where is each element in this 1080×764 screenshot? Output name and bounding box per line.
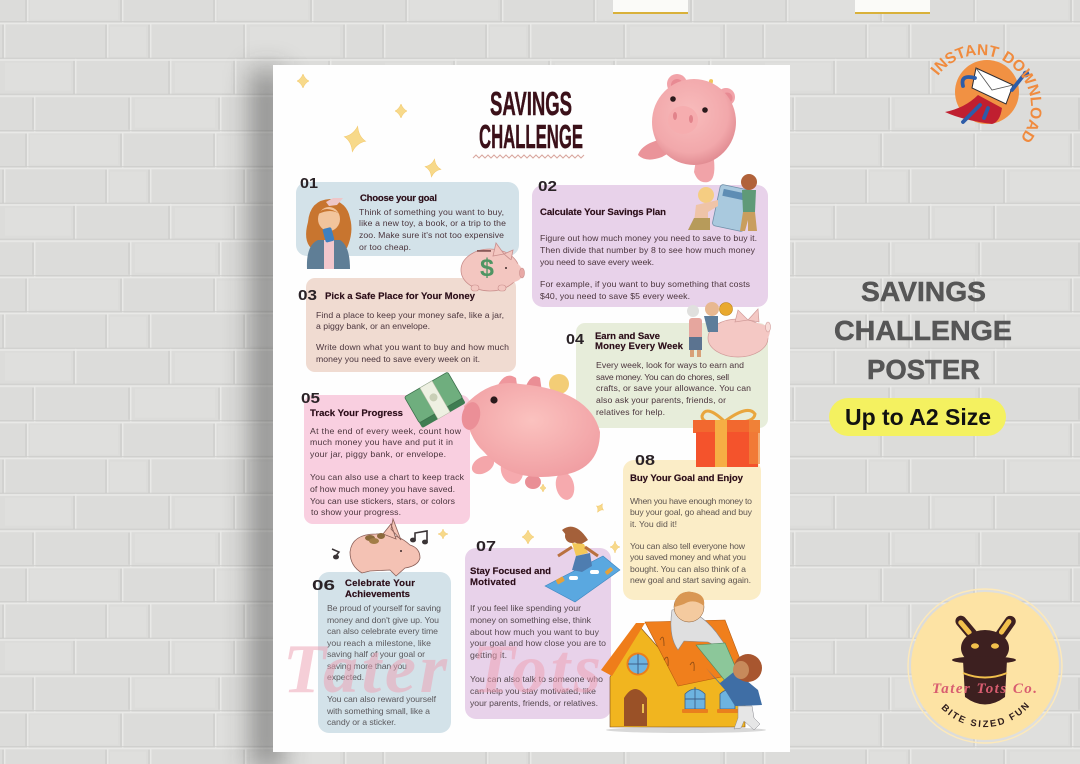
body 04: also ask your parents, friends, or <box>596 395 726 405</box>
number 07: 07 <box>476 538 496 555</box>
body 08: When you have enough money to <box>630 496 752 506</box>
body 07: If you feel like spending your <box>470 603 581 613</box>
body 06: with something small, like a <box>326 706 430 716</box>
icon: kids saving in piggy bank <box>687 302 770 357</box>
body 02: Then divide that number by 8 to see how much money <box>540 245 756 255</box>
body 01: zoo. Make sure it's not too expensive <box>359 230 504 240</box>
logo: Tater Tots Co. <box>907 588 1063 744</box>
icon: girl holding card <box>306 198 351 269</box>
body 02: $40, you need to save $5 every week. <box>540 291 690 301</box>
body 06: You can also reward yourself <box>327 694 437 704</box>
body 02: For example, if you want to buy something that costs <box>540 279 751 289</box>
icon: stack of cash <box>404 372 466 428</box>
body 08: buy your goal, go ahead and buy <box>630 507 753 517</box>
number 01: 01 <box>300 175 318 192</box>
panel: step 02 calculate <box>532 178 768 307</box>
body 07 <box>470 603 606 708</box>
icon: piggy bank with dollar sign <box>461 243 524 291</box>
body 07: You can also talk to someone who <box>470 674 603 684</box>
body 07: can help you stay motivated, like <box>470 686 596 696</box>
body 05: to show your progress. <box>311 507 401 517</box>
badge: up to A2 size: Up to A2 Size <box>845 404 991 430</box>
heading 06: Celebrate Your <box>345 578 415 589</box>
body 01: like a new toy, a book, or a trip to the <box>359 218 506 228</box>
icon: flying 3D piggy top <box>638 74 736 182</box>
heading 01: Choose your goal <box>360 193 437 204</box>
heading: savings challenge poster <box>834 276 1012 385</box>
panel: step 04 earn and save <box>566 323 768 428</box>
body 02: Figure out how much money you need to save to buy it. <box>540 233 757 243</box>
ceiling lamps <box>613 0 930 14</box>
body 06: can also celebrate every time <box>327 626 438 636</box>
body 04 <box>596 360 751 417</box>
body 08: it. You did it! <box>630 519 677 529</box>
body 07: getting it. <box>470 650 507 660</box>
panel: step 08 buy your goal <box>623 452 761 600</box>
body 06: candy or a sticker. <box>327 717 396 727</box>
body 06: money and don't give up. You <box>327 615 439 625</box>
body 06: expected. <box>327 672 364 682</box>
heading 04: Earn and Save <box>595 331 660 342</box>
body 06: saving more than you <box>327 661 407 671</box>
body 06: you reach a milestone, like <box>327 638 431 648</box>
body 08: you saved money and what you <box>630 552 746 562</box>
body 08: You can also tell everyone how <box>630 541 746 551</box>
heading 02: Calculate Your Savings Plan <box>540 207 666 218</box>
body 07: money on something else, think <box>470 615 592 625</box>
poster sheet <box>273 65 790 752</box>
title wavy underline <box>473 155 584 158</box>
badge: instant download: INSTANT DOWNLOAD <box>930 44 1042 142</box>
body 05: You can use stickers, stars, or colors <box>310 496 456 506</box>
body 03: Write down what you want to buy and how much <box>316 342 509 352</box>
body 04: crafts, or save your allowance. You can <box>596 383 751 393</box>
number 08: 08 <box>635 452 655 469</box>
body 07: your parents, friends, or relatives. <box>470 698 598 708</box>
body 03: a piggy bank, or an envelope. <box>316 321 430 331</box>
badge: up to A2 size <box>829 398 1006 436</box>
body 07: your goal and how close you are to <box>470 638 606 648</box>
title <box>479 85 583 155</box>
heading 06: Achievements <box>345 589 410 600</box>
heading 08: Buy Your Goal and Enjoy <box>630 473 744 484</box>
body 04: Every week, look for ways to earn and <box>596 360 744 370</box>
body 08 <box>630 496 753 585</box>
heading 07: Stay Focused and <box>470 566 551 577</box>
body 05: At the end of every week, count how <box>310 426 462 436</box>
body 01: or too cheap. <box>359 242 411 252</box>
number 04: 04 <box>566 331 585 348</box>
title: SAVINGS <box>490 85 572 122</box>
title: CHALLENGE <box>479 118 583 155</box>
icon: runner on credit card <box>545 527 620 602</box>
heading 04: Money Every Week <box>595 341 684 352</box>
body 03: Find a place to keep your money safe, like a jar, <box>316 310 504 320</box>
panel: step 01 choose your goal <box>296 175 519 256</box>
icon: piggy bank with dollar sign: $ <box>480 254 494 282</box>
panel: step 06 celebrate <box>312 572 451 733</box>
panel: step 03 safe place <box>298 278 516 372</box>
heading 04 <box>595 331 684 352</box>
logo: Tater Tots Co.: BITE SIZED FUN <box>941 702 1030 728</box>
body 01 <box>359 207 506 252</box>
panel: step 07 stay focused <box>465 538 611 719</box>
number 03: 03 <box>298 287 317 304</box>
heading 07 <box>470 566 551 588</box>
body 07: about how much you want to buy <box>470 627 600 637</box>
body 06: saving half of your goal or <box>327 649 425 659</box>
body 05: much money you have and put it in <box>310 437 453 447</box>
body 03: money you need to save every week on it. <box>316 354 480 364</box>
watermark: Tater Tots <box>283 631 601 708</box>
heading: savings challenge poster: POSTER <box>867 354 980 385</box>
body 05 <box>310 426 465 517</box>
icon: big 3D piggy bank <box>459 374 600 502</box>
heading 05: Track Your Progress <box>310 408 403 419</box>
heading 07: Motivated <box>470 577 516 588</box>
icon: piggy with coins and music notes <box>332 519 428 576</box>
body 01: Think of something you want to buy, <box>359 207 504 217</box>
decorative sparkle stars <box>297 74 620 553</box>
body 05: You can also use a chart to keep track <box>310 472 465 482</box>
number 05: 05 <box>301 390 320 407</box>
body 02 <box>540 233 757 301</box>
body 05: your jar, piggy bank, or envelope. <box>310 449 446 459</box>
body 04: relatives for help. <box>596 407 665 417</box>
heading: savings challenge poster: CHALLENGE <box>834 315 1012 346</box>
body 08: bought. You can also think of a <box>630 564 746 574</box>
heading 06 <box>345 578 415 600</box>
panel: step 05 track your progress <box>301 390 470 524</box>
body 08: new goal and start saving again. <box>630 575 751 585</box>
icon: kids with calculator <box>688 174 757 232</box>
body 02: you need to save every week. <box>540 257 654 267</box>
body 06 <box>326 603 441 727</box>
body 05: of how much money you have saved. <box>310 484 455 494</box>
heading: savings challenge poster: SAVINGS <box>861 276 986 307</box>
body 06: Be proud of yourself for saving <box>327 603 441 613</box>
number 06: 06 <box>312 577 335 594</box>
icon: rabbit in a hat <box>952 613 1018 704</box>
logo: Tater Tots Co.: Tater Tots Co. <box>932 681 1037 697</box>
icon: house with kids <box>601 592 766 733</box>
body 03 <box>316 310 509 364</box>
icon: gift box <box>693 410 760 467</box>
body 04: save money. You can do chores, sell <box>596 372 729 382</box>
number 02: 02 <box>538 178 557 195</box>
poster shadow <box>252 70 282 764</box>
heading 03: Pick a Safe Place for Your Money <box>325 291 476 302</box>
